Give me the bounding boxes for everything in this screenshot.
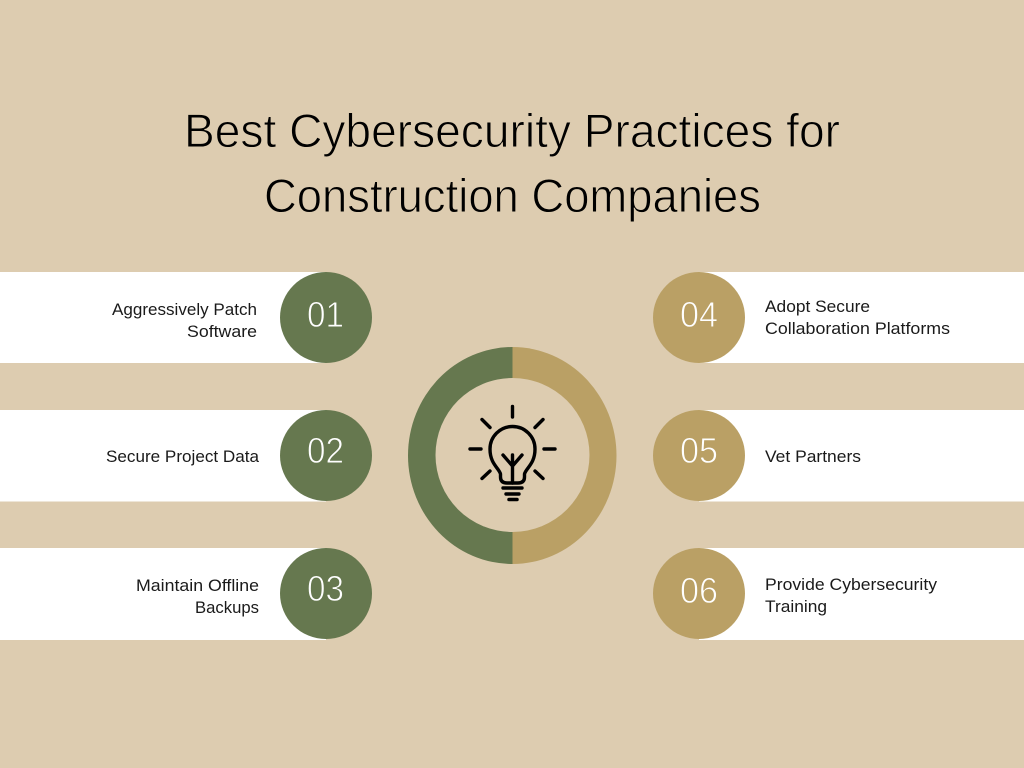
item 02 xyxy=(0,410,372,502)
title: Construction Companies xyxy=(264,169,761,222)
item 01: Software xyxy=(187,322,257,341)
item 06: 06 xyxy=(680,570,718,611)
item 04: Collaboration Platforms xyxy=(765,319,950,338)
item 03 xyxy=(0,548,372,640)
item 04: 04 xyxy=(680,294,718,335)
title xyxy=(184,104,840,222)
item 05 xyxy=(653,410,1024,502)
item 01: 01 xyxy=(307,294,344,335)
central ring xyxy=(408,347,616,564)
item 05: Vet Partners xyxy=(765,447,861,466)
title: Best Cybersecurity Practices for xyxy=(184,104,840,157)
item 02: 02 xyxy=(307,430,344,471)
item 05: 05 xyxy=(680,430,718,471)
item 03: Maintain Offline xyxy=(136,576,259,595)
item 04: Adopt Secure xyxy=(765,297,870,316)
item 01 xyxy=(0,272,372,363)
item 06: Training xyxy=(765,597,827,616)
item 02: Secure Project Data xyxy=(106,447,260,466)
icon: light bulb xyxy=(470,406,555,500)
item 06 xyxy=(653,548,1024,640)
item 04 xyxy=(653,272,1024,363)
item 01: Aggressively Patch xyxy=(112,300,257,319)
item 03: Backups xyxy=(195,598,259,617)
item 06: Provide Cybersecurity xyxy=(765,575,938,594)
item 03: 03 xyxy=(307,568,344,609)
